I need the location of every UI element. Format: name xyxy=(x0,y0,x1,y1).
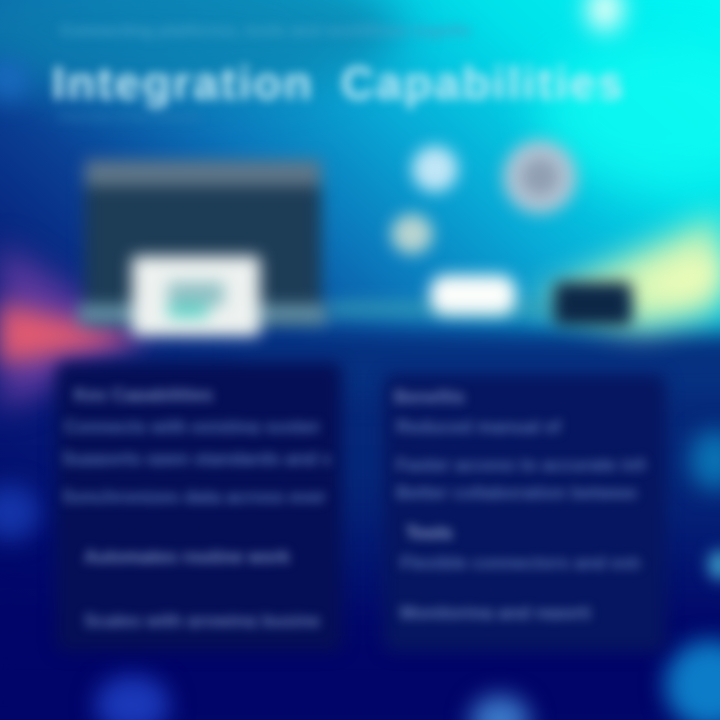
light flare: top xyxy=(586,0,624,32)
background glow: top left xyxy=(0,0,400,100)
title: Integration Capabilities xyxy=(52,57,625,109)
panel: right card text xyxy=(390,385,649,624)
icon: dark box xyxy=(554,282,632,326)
glow: right middle xyxy=(690,430,720,490)
glow: left middle xyxy=(0,485,40,540)
glow: bottom left xyxy=(95,675,170,720)
lower band xyxy=(90,345,720,720)
glow: left edge top xyxy=(0,60,28,100)
background glow: top right cyan xyxy=(540,40,720,190)
base line glow xyxy=(78,304,328,324)
card teal strip xyxy=(168,304,208,318)
window header xyxy=(85,160,321,186)
icon: light blue circle xyxy=(412,146,458,192)
icon: white card xyxy=(132,256,260,336)
lower band fade xyxy=(0,480,720,720)
panel: left card text xyxy=(60,384,334,632)
panel: right card xyxy=(384,374,666,652)
glow: bottom center xyxy=(470,695,530,720)
panel: software window xyxy=(76,150,332,334)
panel: left card xyxy=(56,362,342,652)
connector glow xyxy=(330,300,630,318)
card accent xyxy=(168,282,224,306)
window body xyxy=(85,186,321,322)
lower band top edge xyxy=(240,338,720,398)
icon: small circle xyxy=(391,214,433,254)
icon: gear circle xyxy=(503,140,577,214)
icon: white pill xyxy=(430,275,516,315)
gear center xyxy=(521,158,559,196)
glow: bottom right xyxy=(665,640,720,720)
glow: right edge small xyxy=(708,550,720,580)
